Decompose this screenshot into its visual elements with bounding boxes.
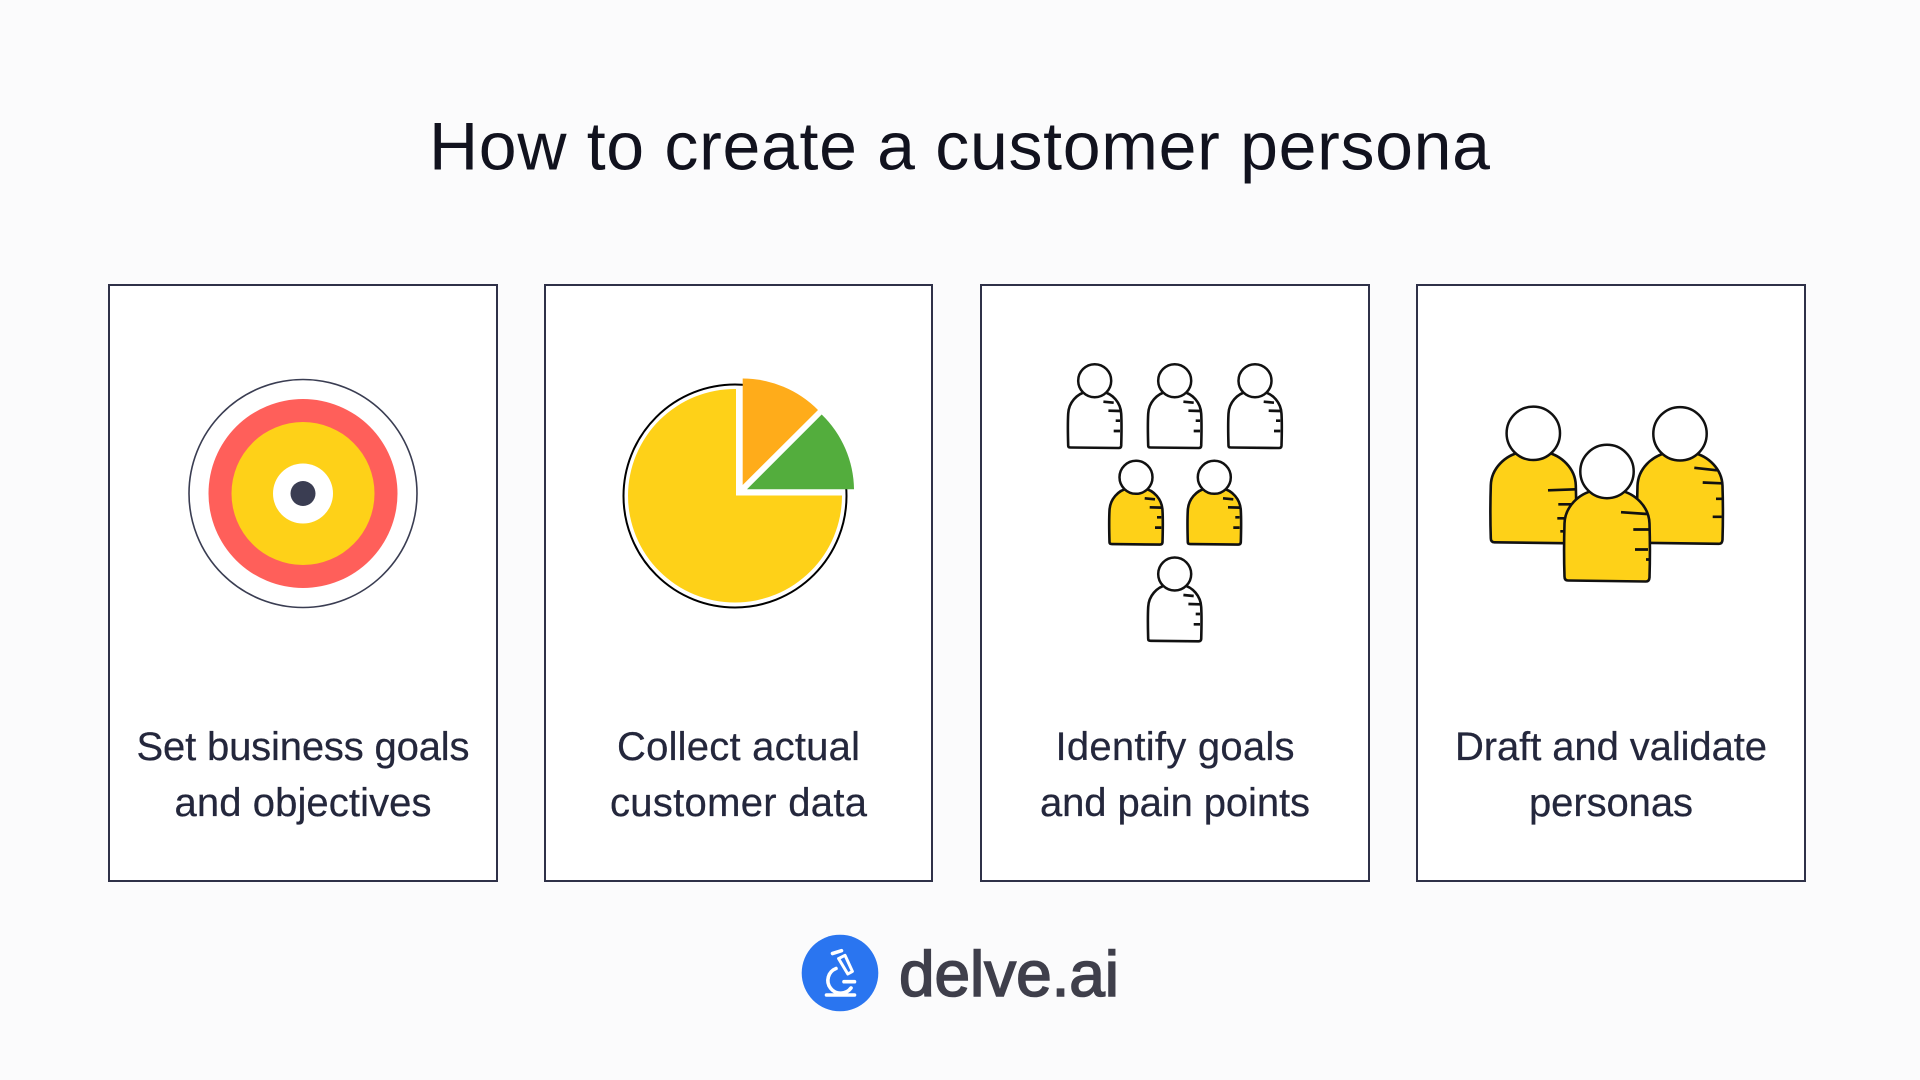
label: set business goals [136, 725, 470, 825]
icon: three personas [1490, 407, 1723, 582]
label: set business goals: Set business goals [136, 725, 470, 769]
panel: draft and validate personas [1417, 285, 1805, 881]
label: draft and validate personas: Draft and validate [1455, 725, 1767, 769]
icon: pie chart [624, 378, 854, 608]
label: collect customer data: Collect actual [617, 725, 860, 769]
label: collect customer data [610, 725, 868, 825]
label: identify goals and pain points: and pain points [1040, 781, 1310, 825]
title: How to create a customer persona [429, 108, 1490, 184]
label: collect customer data: customer data [610, 781, 868, 825]
label: draft and validate personas: personas [1529, 781, 1693, 825]
icon: target [189, 380, 417, 608]
panel: collect customer data [545, 285, 932, 881]
label: draft and validate personas [1455, 725, 1767, 825]
label: identify goals and pain points [1040, 725, 1310, 825]
icon: microscope [802, 935, 878, 1011]
logo: delve.ai [802, 935, 1119, 1011]
wordmark: delve.ai [899, 938, 1119, 1010]
panel: identify goals and pain points [981, 285, 1369, 881]
label: identify goals and pain points: Identify goals [1056, 725, 1294, 769]
label: set business goals: and objectives [174, 781, 432, 825]
panel: set business goals [109, 285, 497, 881]
icon: group of six persons [1068, 364, 1282, 641]
